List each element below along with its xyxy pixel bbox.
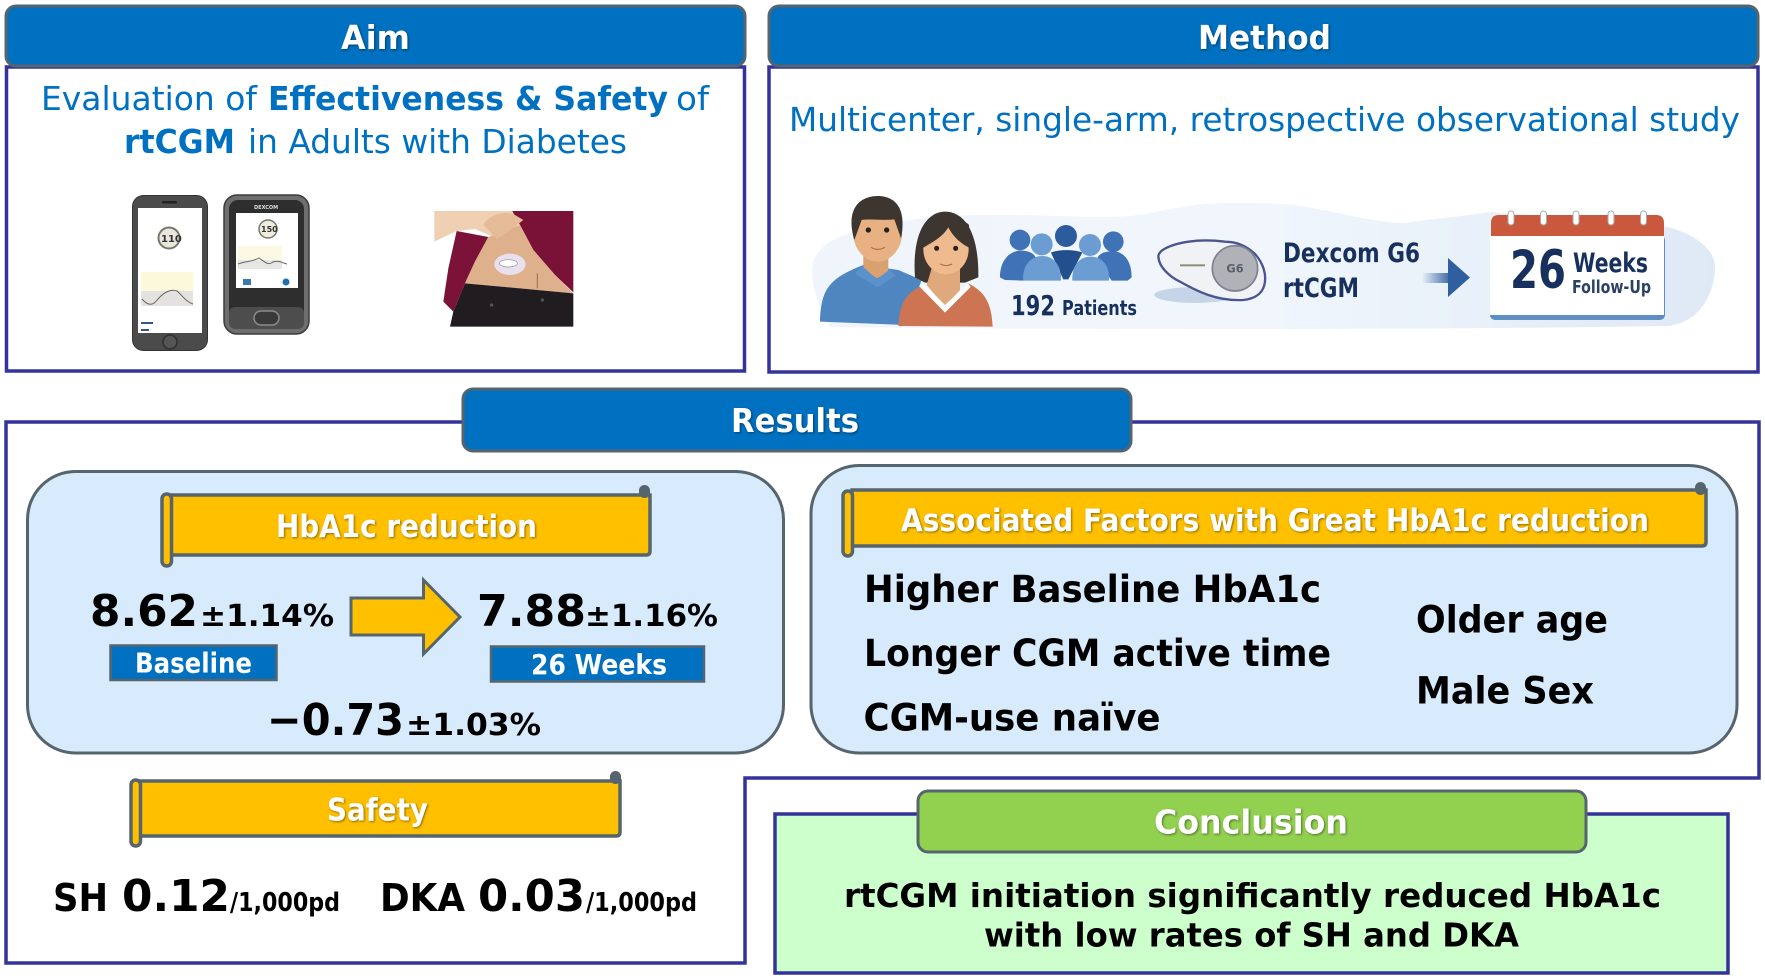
value: DKA rate: /1,000pd	[586, 888, 697, 918]
text: left factors: Higher Baseline HbA1c	[864, 568, 1321, 611]
value: baseline HbA1c: ±1.14%	[200, 599, 334, 634]
label: 26 weeks	[491, 646, 704, 682]
heading: conclusion	[918, 791, 1586, 852]
text: 192 patients	[1011, 289, 1137, 322]
icon: man and woman	[820, 196, 993, 327]
value: baseline HbA1c	[90, 586, 334, 637]
heading: aim	[6, 6, 745, 66]
text: dexcom G6 rtCGM: Dexcom G6	[1283, 238, 1420, 269]
arrow: sensor to follow-up	[1422, 258, 1470, 297]
panel: aim	[6, 6, 745, 371]
icon: smartphone with CGM app	[132, 196, 208, 350]
value: HbA1c change: −0.73	[267, 695, 404, 746]
icon: patient group	[1000, 225, 1132, 281]
value: 26-week HbA1c	[477, 586, 718, 637]
value: severe hypoglycemia rate	[53, 871, 340, 922]
text: right factors: Male Sex	[1416, 670, 1594, 712]
banner: HbA1c reduction	[162, 485, 650, 566]
value: HbA1c change: ±1.03%	[406, 708, 541, 743]
icon: sensor worn on abdomen photo	[434, 211, 573, 327]
heading: results: Results	[731, 401, 859, 440]
heading: results	[463, 389, 1131, 451]
text: left factors: Longer CGM active time	[864, 632, 1331, 675]
text: 192 patients: 192	[1011, 289, 1055, 322]
value: DKA rate	[380, 871, 697, 922]
banner: safety	[131, 771, 621, 846]
text: aim statement: in Adults with Diabetes	[248, 122, 627, 161]
value: DKA rate: 0.03	[478, 871, 585, 922]
heading: method	[769, 6, 1758, 66]
panel: HbA1c reduction	[28, 472, 784, 753]
icon: dexcom G6 sensor: G6	[1226, 261, 1244, 275]
icon: dexcom receiver	[224, 195, 309, 334]
text: right factors	[1416, 598, 1608, 712]
text: aim statement: of	[676, 79, 710, 118]
text: conclusion statement: with low rates of SH and DKA	[984, 916, 1519, 954]
panel: results	[6, 389, 1759, 963]
text: aim statement: Evaluation of	[41, 79, 258, 118]
heading: aim: Aim	[341, 18, 410, 57]
icon: dexcom G6 sensor	[1154, 240, 1265, 303]
banner: safety: Safety	[327, 792, 428, 828]
text: aim statement	[41, 79, 710, 161]
text: aim statement: rtCGM	[124, 122, 235, 161]
text: left factors: CGM-use naïve	[864, 696, 1160, 740]
icon: calendar 26 weeks: Weeks	[1573, 248, 1648, 279]
text: right factors: Older age	[1416, 598, 1608, 642]
icon: dexcom receiver: 150	[261, 225, 278, 234]
text: study design: Multicenter, single-arm, retrospective observational study	[789, 100, 1740, 139]
panel: method	[769, 6, 1758, 372]
text: conclusion statement	[844, 876, 1661, 954]
text: dexcom G6 rtCGM: rtCGM	[1283, 273, 1359, 304]
icon: smartphone with CGM app: 110	[161, 234, 182, 245]
text: conclusion statement: rtCGM initiation significantly reduced HbA1c	[844, 876, 1661, 915]
icon: dexcom receiver: DEXCOM	[254, 205, 278, 211]
icon: calendar 26 weeks: 26	[1510, 240, 1566, 301]
arrow: baseline to 26 weeks	[351, 580, 460, 654]
value: severe hypoglycemia rate: 0.12	[122, 871, 230, 922]
heading: method: Method	[1198, 18, 1331, 57]
value: severe hypoglycemia rate: SH	[53, 876, 108, 920]
value: severe hypoglycemia rate: /1,000pd	[230, 888, 340, 918]
banner: HbA1c reduction: HbA1c reduction	[276, 509, 537, 545]
value: HbA1c change	[267, 695, 541, 746]
banner: associated factors	[843, 482, 1706, 556]
icon: calendar 26 weeks	[1490, 211, 1665, 320]
panel: associated factors	[811, 466, 1737, 753]
panel: conclusion	[775, 791, 1728, 973]
value: 26-week HbA1c: 7.88	[477, 586, 586, 637]
heading: conclusion: Conclusion	[1154, 802, 1348, 842]
text: 192 patients: Patients	[1062, 296, 1137, 320]
text: aim statement: Effectiveness & Safety	[268, 79, 668, 118]
value: DKA rate: DKA	[380, 876, 466, 920]
text: left factors	[864, 568, 1331, 740]
value: 26-week HbA1c: ±1.16%	[585, 599, 718, 634]
icon: calendar 26 weeks: Follow-Up	[1572, 277, 1651, 298]
value: baseline HbA1c: 8.62	[90, 586, 198, 637]
text: dexcom G6 rtCGM	[1283, 238, 1420, 304]
label: baseline: Baseline	[135, 646, 252, 680]
label: 26 weeks: 26 Weeks	[531, 648, 667, 681]
banner: associated factors: Associated Factors with Great HbA1c reduction	[901, 503, 1649, 539]
illustration background	[812, 203, 1715, 329]
